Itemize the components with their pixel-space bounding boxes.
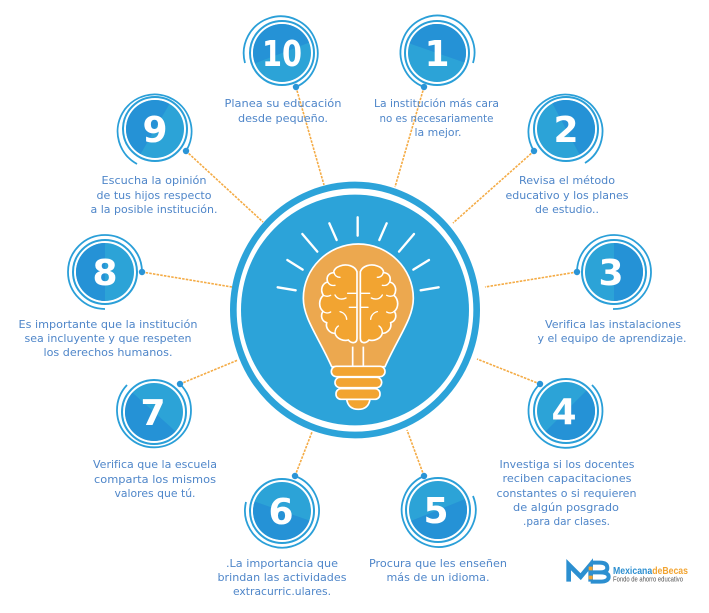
step 6: brindan las actividades	[218, 571, 347, 584]
step 1: la mejor.	[414, 126, 462, 139]
filament	[353, 347, 363, 367]
central lightbulb emblem	[233, 185, 477, 435]
step 2: educativo y los planes	[506, 189, 629, 202]
step 5: 5	[423, 491, 449, 532]
step 8: los derechos humanos.	[44, 346, 172, 359]
step 1: La institución más cara	[374, 97, 499, 110]
step 2: Revisa el método	[519, 174, 615, 187]
step 7: 7	[140, 393, 166, 434]
step 6: 6	[268, 492, 294, 533]
step 4: Investiga si los docentes	[500, 458, 635, 471]
step 8: sea incluyente y que respeten	[24, 332, 192, 345]
step 7: comparta los mismos	[94, 473, 216, 486]
step 1: no es necesariamente	[380, 112, 494, 125]
step 2: de estudio..	[535, 203, 599, 216]
logo mark	[569, 563, 609, 582]
step 3: Verifica las instalaciones	[545, 318, 681, 331]
step 6: .La importancia que	[226, 557, 338, 570]
bulb glass	[303, 244, 413, 367]
step 6: extracurric.ulares.	[233, 585, 331, 598]
step 3: 3	[598, 253, 624, 294]
step 10	[224, 16, 342, 125]
logo: Mexicana de Becas	[569, 563, 688, 584]
step 10: Planea su educación	[224, 97, 342, 110]
step 7	[93, 380, 217, 500]
step 10: 10	[262, 34, 302, 75]
step 1	[374, 16, 499, 139]
step 4: .para dar clases.	[523, 515, 610, 528]
light rays	[278, 217, 439, 290]
step 10: desde pequeño.	[238, 112, 328, 125]
logo tagline: Fondo de ahorro educativo	[613, 574, 683, 584]
step 5: más de un idioma.	[386, 571, 490, 584]
step 2: 2	[553, 110, 579, 151]
step 4: constantes o si requieren	[496, 487, 637, 500]
step 1: 1	[424, 34, 450, 75]
step 9	[90, 89, 218, 216]
outer ring	[233, 185, 477, 435]
connector lines	[142, 87, 577, 476]
step 5	[369, 473, 507, 584]
brain	[320, 265, 398, 343]
step 8: Es importante que la institución	[18, 318, 198, 331]
step 9: a la posible institución.	[90, 203, 218, 216]
logo wordmark: MexicanadeBecas	[613, 565, 688, 577]
step 4: de algún posgrado	[513, 501, 619, 514]
step 9: de tus hijos respecto	[96, 189, 212, 202]
step 4	[496, 379, 637, 528]
step 2	[506, 90, 629, 216]
step 3	[538, 235, 686, 345]
blue disc	[241, 195, 469, 425]
step 4: 4	[551, 392, 577, 433]
step 9: 9	[142, 110, 168, 151]
step 4: reciben capacitaciones	[502, 472, 632, 485]
bulb base	[331, 366, 385, 409]
step 8	[18, 235, 198, 359]
step 7: valores que tú.	[114, 487, 196, 500]
step 5: Procura que les enseñen	[369, 557, 507, 570]
step 8: 8	[92, 253, 118, 294]
step 6	[218, 473, 347, 598]
step 7: Verifica que la escuela	[93, 458, 217, 471]
step 9: Escucha la opinión	[102, 174, 207, 187]
step 3: y el equipo de aprendizaje.	[538, 332, 686, 345]
